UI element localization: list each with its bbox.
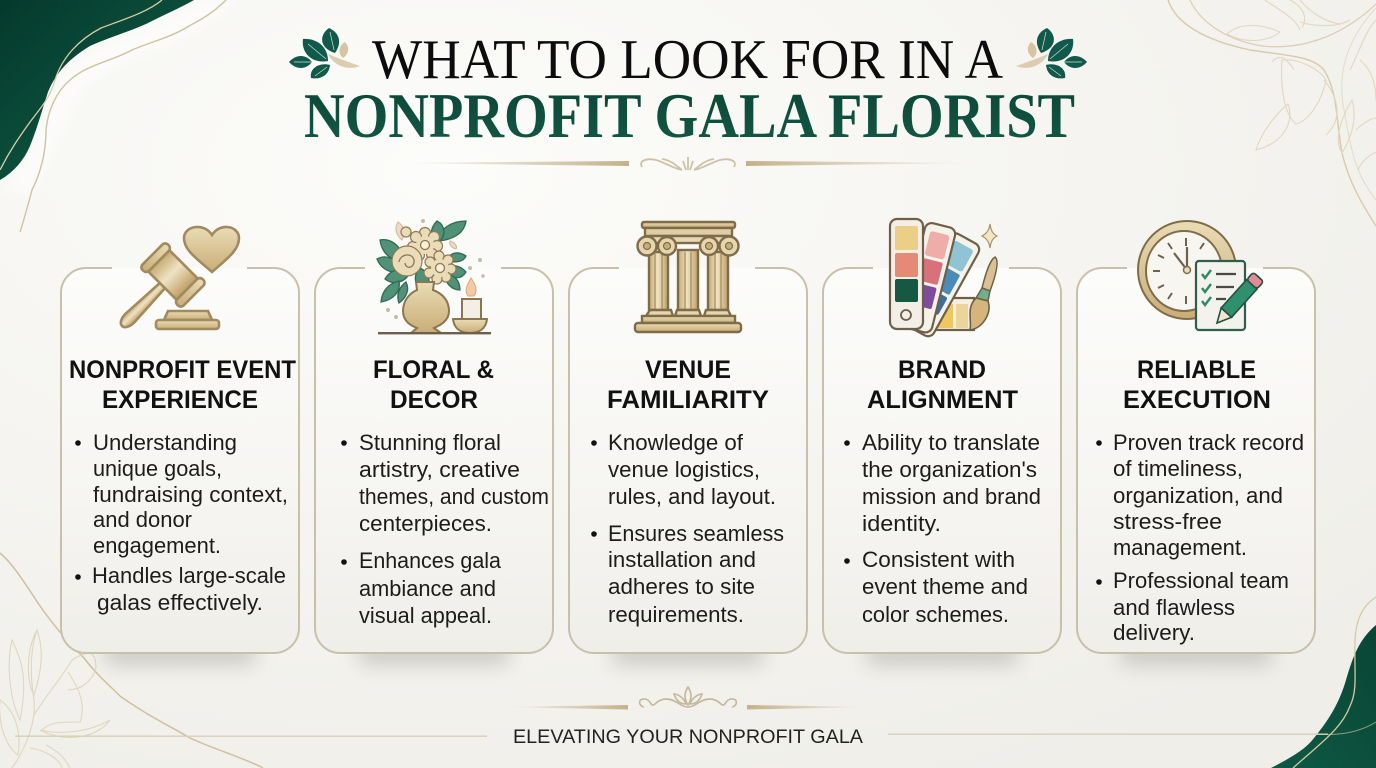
heading (867, 356, 1018, 414)
bullet list: Ensures seamless (608, 521, 784, 546)
bullet list: delivery. (1113, 620, 1195, 645)
heading (69, 356, 296, 414)
bullet list: centerpieces. (359, 511, 492, 536)
bullet list: Proven track record (1113, 430, 1304, 455)
card shadow (105, 642, 255, 664)
icon: flower vase and candle (377, 219, 491, 334)
card background (1077, 268, 1315, 653)
bullet list: themes, and custom (359, 484, 549, 509)
bullet list: venue logistics, (608, 457, 760, 482)
title line 1: WHAT TO LOOK FOR IN A (372, 29, 1004, 91)
card shadow (1121, 642, 1271, 664)
heading: DECOR (390, 386, 478, 414)
bullet list (844, 430, 1041, 627)
bullet list: installation and (608, 547, 756, 572)
bullet list: galas effectively. (97, 590, 263, 615)
heading (607, 356, 769, 414)
bullet list: and donor (93, 507, 192, 532)
bullet list: requirements. (608, 602, 744, 627)
card border (569, 268, 807, 653)
bullet list: organization, and (1113, 483, 1283, 508)
bullet list: Enhances gala (359, 548, 502, 573)
bullet list: management. (1113, 535, 1247, 560)
heading: ALIGNMENT (867, 386, 1018, 414)
bullet list: unique goals, (93, 456, 222, 481)
bullet list: Stunning floral (359, 430, 501, 455)
icon: gavel and heart (102, 227, 239, 346)
decoration: top-right botanical line art (1168, 0, 1376, 226)
decoration: bottom-left botanical line art (0, 553, 263, 768)
card border (61, 268, 299, 653)
bullet list: engagement. (93, 533, 221, 558)
icon: colour swatch fan and brush (890, 219, 997, 339)
bullet list: artistry, creative (359, 457, 520, 482)
card background (569, 268, 807, 653)
bullet list (341, 430, 549, 628)
heading: FLORAL & (373, 356, 494, 384)
bullet list: event theme and (862, 574, 1028, 599)
bullet list: visual appeal. (359, 603, 492, 628)
card background (61, 268, 299, 653)
card shadow (613, 642, 763, 664)
card border (1077, 268, 1315, 653)
icon: right leaf sprig (1016, 28, 1087, 78)
bullet list: color schemes. (862, 602, 1009, 627)
bullet list: Knowledge of (608, 430, 744, 455)
icon: clock, checklist and pencil (1138, 221, 1264, 330)
bullet list: Understanding (93, 430, 237, 455)
heading: RELIABLE (1137, 356, 1256, 384)
footer rule right (888, 734, 1328, 735)
bullet list: Ability to translate (862, 430, 1040, 455)
bullet list (591, 430, 784, 627)
heading (1123, 356, 1271, 414)
bullet list (75, 430, 288, 615)
heading: EXECUTION (1123, 386, 1271, 414)
card border (823, 268, 1061, 653)
bullet list: identity. (862, 511, 941, 536)
bullet list: and flawless (1113, 595, 1235, 620)
heading: FAMILIARITY (607, 386, 769, 414)
bullet list (1096, 430, 1304, 645)
heading: NONPROFIT EVENT (69, 356, 296, 384)
bullet list: stress-free (1113, 509, 1222, 534)
footer tagline: ELEVATING YOUR NONPROFIT GALA (513, 727, 863, 748)
card background (315, 268, 553, 653)
bullet list: Consistent with (862, 547, 1015, 572)
heading: VENUE (645, 356, 731, 384)
panel: reliable execution (1077, 221, 1315, 664)
title (304, 29, 1075, 151)
heading: EXPERIENCE (102, 386, 258, 414)
title line 2: NONPROFIT GALA FLORIST (304, 81, 1075, 151)
bullet list: of timeliness, (1113, 456, 1243, 481)
decoration: bottom-right green wave (1271, 597, 1376, 768)
panel: floral and decor (315, 219, 553, 664)
card border (315, 268, 553, 653)
card background (823, 268, 1061, 653)
card shadow (867, 642, 1017, 664)
bullet list: Professional team (1113, 568, 1289, 593)
panel: venue familiarity (569, 222, 807, 664)
footer ornament (504, 687, 872, 710)
bullet list: adheres to site (608, 574, 755, 599)
bullet list: rules, and layout. (608, 484, 776, 509)
icon: left leaf sprig (289, 28, 360, 78)
decoration: top-left green wave (0, 0, 240, 232)
panel: brand alignment (823, 219, 1061, 664)
panel: nonprofit event experience (61, 227, 299, 664)
bullet list: fundraising context, (93, 482, 288, 507)
bullet list: the organization's (862, 457, 1037, 482)
heading: BRAND (898, 356, 986, 384)
bullet list: ambiance and (359, 576, 496, 601)
heading (373, 356, 494, 414)
bullet list: Handles large-scale (92, 563, 286, 588)
title divider ornament (394, 157, 980, 170)
card shadow (359, 642, 509, 664)
icon: columns (635, 222, 741, 332)
bullet list: mission and brand (862, 484, 1041, 509)
footer rule left (15, 736, 487, 737)
